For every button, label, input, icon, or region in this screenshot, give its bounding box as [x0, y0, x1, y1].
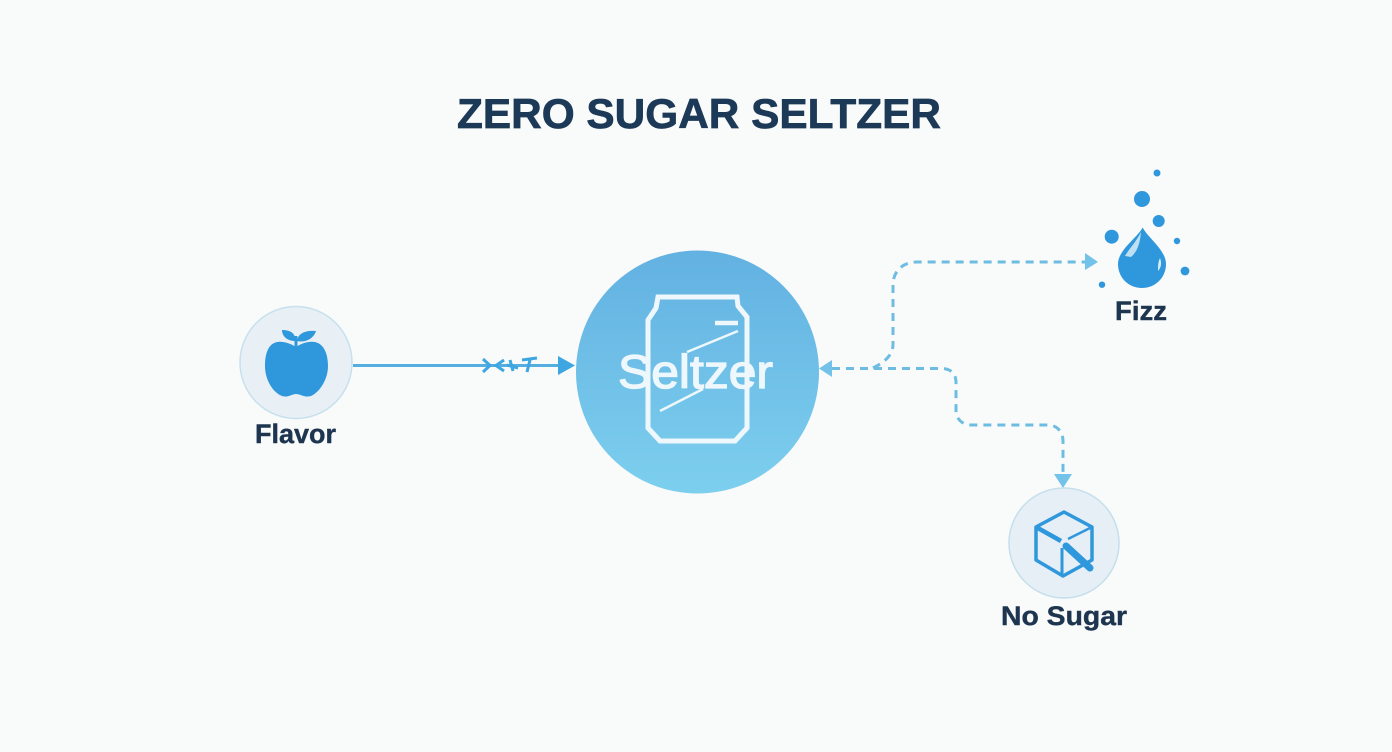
hub circle [576, 250, 819, 494]
icon: apple [265, 330, 328, 397]
flavor circle [240, 306, 352, 418]
hub label: Seltzer [618, 345, 773, 398]
node: flavor [240, 306, 352, 449]
arrow: seltzer to fizz [873, 253, 1098, 368]
no sugar label: No Sugar [1001, 601, 1128, 631]
node: no sugar [1001, 488, 1128, 631]
icon: crossed sugar cube [1036, 512, 1092, 576]
flavor label: Flavor [255, 419, 336, 449]
arrow: flavor to seltzer [353, 356, 575, 375]
icon: water drop with bubbles [1099, 170, 1189, 288]
icon: can [648, 297, 747, 441]
arrow: seltzer to no sugar [819, 360, 1072, 488]
node: seltzer hub [576, 250, 819, 494]
fizz label: Fizz [1115, 296, 1167, 326]
node: fizz [1099, 170, 1189, 326]
title: ZERO SUGAR SELTZER [457, 90, 941, 137]
no sugar circle [1009, 488, 1119, 598]
